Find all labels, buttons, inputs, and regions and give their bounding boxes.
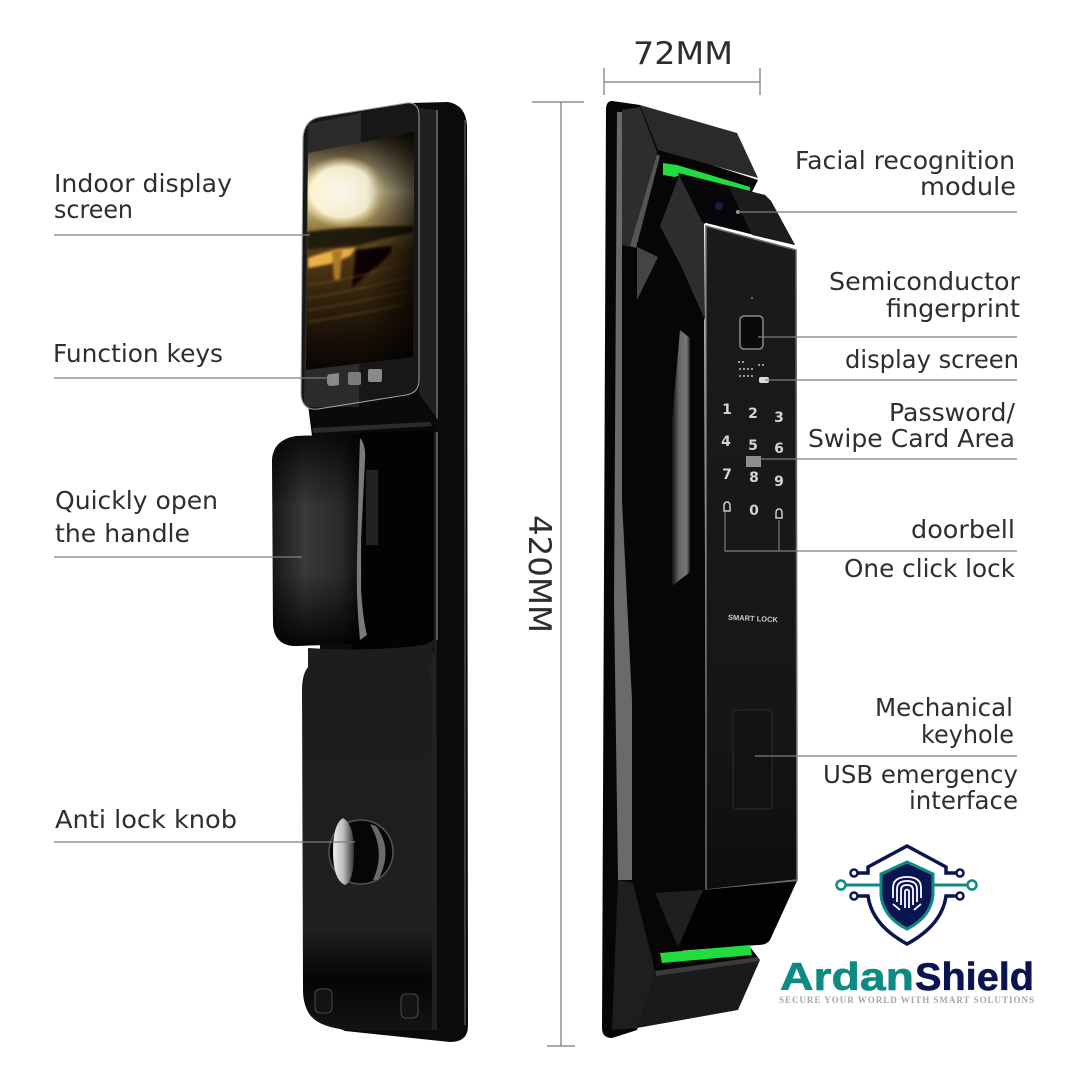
- left lock: indoor unit: [272, 102, 468, 1042]
- bezel reflection: [304, 113, 361, 407]
- label: indoor display screen: Indoor display: [54, 169, 232, 198]
- fingerprint sensor: [740, 316, 763, 349]
- reflection column: [332, 250, 342, 280]
- dimension height: [521, 102, 584, 1046]
- doorbell key: [724, 502, 730, 511]
- anti lock knob: [329, 818, 393, 885]
- water ripples: [308, 268, 402, 324]
- label: function keys: Function keys: [53, 339, 223, 368]
- label: quickly open the handle: Quickly open: [55, 486, 218, 515]
- teal nodes: [836, 880, 976, 890]
- back plate: [320, 102, 468, 1042]
- function key home: [348, 372, 361, 385]
- module sheen: [729, 187, 795, 245]
- right lock: outdoor unit: [602, 101, 797, 1038]
- key 0: 0: [749, 503, 759, 519]
- key 1: 1: [722, 402, 732, 418]
- label: usb emergency interface: USB emergency: [823, 760, 1018, 789]
- front panel: [706, 226, 797, 890]
- bottom cap rim: [655, 957, 760, 976]
- key 3: 3: [774, 410, 784, 426]
- top left facet: [622, 107, 657, 247]
- inner shield: [881, 862, 933, 929]
- label: mechanical keyhole: [875, 693, 1014, 749]
- doorbell and lock lines: [725, 512, 1017, 551]
- display dots: [738, 362, 766, 376]
- facet edge highlight: [630, 154, 660, 248]
- fingerprint line: [758, 336, 1017, 338]
- camera lens left: [715, 202, 723, 210]
- outer edge highlight: [464, 120, 466, 1025]
- label: semiconductor fingerprint: [829, 267, 1021, 323]
- handle shading: [272, 434, 364, 646]
- key 2: 2: [748, 406, 758, 422]
- key 5: 5: [748, 438, 758, 454]
- label: indoor display screen: [54, 169, 232, 224]
- screen module: [298, 103, 420, 409]
- label: indoor display screen: screen: [54, 195, 133, 224]
- label: facial recognition module: Facial recognition: [795, 146, 1015, 175]
- sky and water: [306, 136, 414, 370]
- small display: [738, 362, 769, 383]
- card line: [760, 458, 1017, 460]
- bottom cap: [637, 960, 760, 1028]
- label: semiconductor fingerprint: fingerprint: [886, 294, 1020, 323]
- bridge silhouette: [306, 226, 414, 250]
- facial module line: [738, 211, 1017, 213]
- knob grip shine: [333, 818, 354, 885]
- smart lock mark: SMART LOCK: [728, 613, 779, 624]
- handle recess: [352, 430, 434, 654]
- bevel highlight: [436, 110, 438, 640]
- key 4: 4: [721, 434, 731, 450]
- label: one click lock: One click lock: [844, 554, 1016, 583]
- outer circuit shield: [857, 846, 957, 944]
- lower handle facet: [655, 890, 703, 947]
- key 6: 6: [774, 441, 784, 457]
- label: password swipe card area: Password/: [889, 398, 1016, 427]
- label: facial recognition module: [795, 146, 1016, 201]
- chrome edge: [357, 438, 367, 640]
- mechanical keyhole cover: [733, 710, 772, 809]
- neck below screen: [308, 392, 438, 436]
- label: display screen: display screen: [845, 345, 1019, 374]
- battery icon: [759, 377, 769, 383]
- logo emblem: [836, 846, 976, 944]
- label: quickly open the handle: the handle: [55, 519, 190, 548]
- recess steps: [366, 470, 378, 545]
- teal connectors: [846, 884, 968, 886]
- keypad: [721, 402, 784, 519]
- key 9: 9: [774, 474, 784, 490]
- handle: [272, 434, 367, 646]
- recess frame: [308, 640, 434, 668]
- ArdanShield logo: [779, 846, 1034, 1005]
- display line: [765, 379, 1017, 381]
- corner screw right: [401, 994, 418, 1018]
- pier shadow: [352, 246, 392, 288]
- side bevel: [419, 108, 437, 1030]
- head side facet: [660, 173, 705, 320]
- sunset photo: [306, 132, 414, 370]
- small side facet: [637, 247, 658, 300]
- label: facial recognition module: module: [920, 172, 1016, 201]
- width bar: [604, 68, 760, 95]
- keyhole line: [755, 755, 1017, 757]
- base plate: [602, 101, 760, 1038]
- label: usb emergency interface: [823, 760, 1018, 815]
- right labels: [795, 146, 1021, 815]
- card chip: [746, 456, 761, 467]
- dimension width: [604, 36, 760, 95]
- label: anti lock knob: Anti lock knob: [55, 805, 237, 834]
- function keys line: [54, 377, 331, 379]
- label: semiconductor fingerprint: Semiconductor: [829, 267, 1021, 296]
- handle strip highlight: [672, 330, 690, 586]
- grey rail: [614, 112, 632, 880]
- neck ledge: [312, 422, 432, 433]
- top cap: [640, 105, 758, 178]
- knob base: [329, 820, 393, 884]
- camera lens right: [753, 213, 761, 221]
- handle line: [54, 556, 302, 558]
- fingerprint: [893, 877, 921, 910]
- facial recognition module: [678, 173, 795, 245]
- top green light: [663, 163, 750, 191]
- logo wordmark: [780, 956, 1034, 999]
- bottom green light: [660, 945, 752, 963]
- function key forward: [368, 369, 382, 382]
- function key back: [327, 373, 339, 386]
- leader lines: [54, 212, 1017, 842]
- label: mechanical keyhole: Mechanical: [875, 693, 1013, 722]
- knob right shine: [370, 824, 386, 880]
- left lower facet: [612, 880, 655, 1030]
- key 7: 7: [722, 467, 732, 483]
- label: password swipe card area: [808, 398, 1016, 453]
- microphone dot: [751, 297, 753, 299]
- sun reflection: [308, 248, 356, 268]
- label: password swipe card area: Swipe Card Area: [808, 424, 1015, 453]
- indoor display line: [54, 234, 310, 236]
- bezel: [301, 103, 419, 409]
- right side shade: [344, 132, 414, 358]
- lower plate: [302, 665, 432, 1030]
- width label: 72MM: [633, 36, 733, 72]
- left labels: [53, 169, 237, 834]
- height label: 420MM: [521, 515, 557, 633]
- circuit nodes: [850, 870, 964, 900]
- bottom head taper: [678, 881, 797, 951]
- logo tagline: SECURE YOUR WORLD WITH SMART SOLUTIONS: [779, 995, 1034, 1005]
- logo wordmark: Shield: [915, 956, 1034, 999]
- label: mechanical keyhole: keyhole: [921, 720, 1014, 749]
- logo wordmark: Ardan: [780, 956, 914, 999]
- height bar: [532, 102, 584, 1046]
- sun glow: [308, 156, 381, 227]
- knob line: [54, 841, 355, 843]
- handle body: [272, 434, 364, 646]
- key 8: 8: [749, 470, 759, 486]
- camera lens centre: [736, 210, 740, 214]
- module glass: [678, 173, 795, 245]
- label: doorbell: doorbell: [911, 515, 1015, 544]
- lock key: [776, 509, 782, 518]
- label: quickly open the handle: [55, 486, 218, 548]
- corner screw left: [315, 989, 332, 1013]
- label: usb emergency interface: interface: [909, 786, 1018, 815]
